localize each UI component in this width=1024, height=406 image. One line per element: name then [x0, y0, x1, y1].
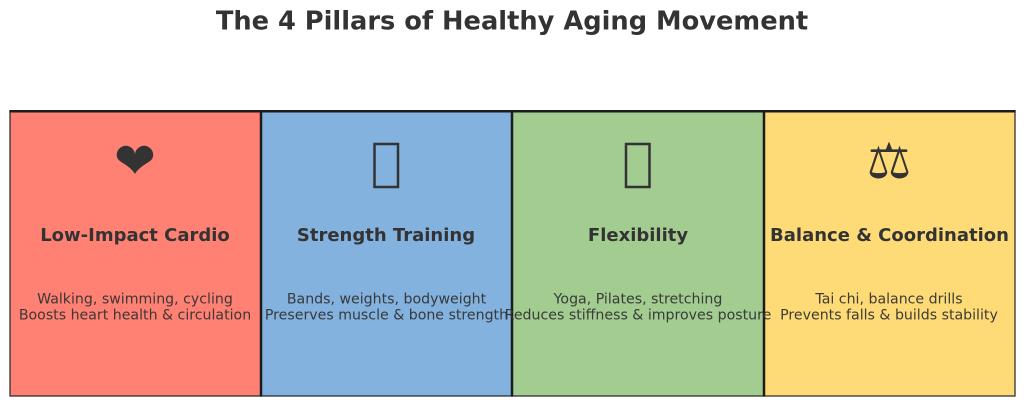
title: The 4 Pillars of Healthy Aging Movement [216, 6, 808, 36]
panel: strength training background [261, 111, 512, 396]
panel: flexibility background [512, 111, 764, 396]
heading: low-impact cardio: Low-Impact Cardio [40, 225, 230, 246]
description: low-impact cardio [19, 292, 251, 324]
icon: missing glyph box [626, 144, 650, 187]
heading: strength training: Strength Training [297, 225, 475, 246]
description: low-impact cardio: Walking, swimming, cycling [37, 292, 233, 308]
description: strength training [265, 292, 508, 324]
description: balance and coordination: Prevents falls & builds stability [780, 308, 998, 324]
icon: missing glyph box [374, 144, 398, 187]
description: strength training: Preserves muscle & bone strength [265, 308, 508, 324]
panel: balance and coordination background [764, 111, 1015, 396]
description: strength training: Bands, weights, bodyweight [287, 292, 487, 308]
content: strength training [265, 144, 508, 324]
description: balance and coordination [780, 292, 998, 324]
description: low-impact cardio: Boosts heart health & circulation [19, 308, 251, 324]
content: flexibility [505, 144, 771, 324]
description: flexibility: Yoga, Pilates, stretching [553, 292, 722, 308]
description: flexibility: Reduces stiffness & improves posture [505, 308, 771, 324]
description: balance and coordination: Tai chi, balance drills [814, 292, 963, 308]
heading: balance and coordination: Balance & Coordination [770, 225, 1009, 246]
description: flexibility [505, 292, 771, 324]
heading: flexibility: Flexibility [588, 225, 688, 246]
panel: low-impact cardio background [10, 111, 261, 396]
icon: heart: ❤ [114, 132, 156, 190]
content: low-impact cardio [19, 132, 251, 324]
icon: balance scales: ⚖ [867, 132, 911, 190]
content: balance and coordination [770, 132, 1009, 324]
